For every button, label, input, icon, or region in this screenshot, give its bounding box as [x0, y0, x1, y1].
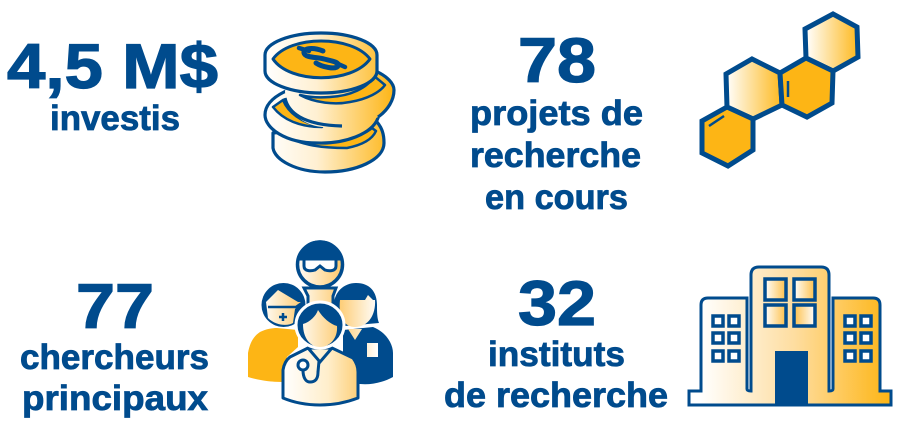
stat: 32 instituts de recherche: instituts — [488, 335, 625, 374]
door — [775, 351, 808, 406]
stat: 77 chercheurs principaux: 77 — [76, 272, 154, 342]
stat: 78 projets de recherche en cours: projets de — [470, 94, 643, 133]
stat: 32 instituts de recherche: 32 — [518, 269, 596, 339]
stat: 4,5 M$ investis — [7, 32, 218, 138]
stat: 4,5 M$ investis: investis — [50, 99, 180, 138]
person: left with mask — [248, 283, 306, 382]
stat: 77 chercheurs principaux: principaux — [22, 379, 209, 418]
icon: institute building — [689, 267, 891, 406]
stat: 77 chercheurs principaux: chercheurs — [20, 338, 209, 377]
left windows — [713, 316, 739, 361]
stat: 78 projets de recherche en cours: en cours — [485, 178, 628, 217]
stat: 4,5 M$ investis: 4,5 M$ — [7, 32, 218, 102]
icon: stack of coins — [265, 33, 394, 172]
stat: 32 instituts de recherche: de recherche — [444, 376, 668, 415]
stat: 78 projets de recherche en cours: 78 — [518, 26, 596, 96]
person: top with goggles — [298, 240, 342, 312]
icon: research team — [248, 240, 393, 405]
stat: 78 projets de recherche en cours: recherche — [470, 136, 641, 175]
person: right in navy — [334, 283, 393, 384]
center windows — [765, 279, 815, 326]
stat: 78 projets de recherche en cours — [470, 26, 643, 217]
stat: 32 instituts de recherche — [444, 269, 668, 415]
stat: 77 chercheurs principaux — [20, 272, 209, 418]
icon: molecule hexagons — [702, 14, 858, 166]
person: front doctor — [283, 302, 358, 405]
icon: dollar sign — [299, 48, 345, 68]
right windows — [845, 316, 871, 361]
